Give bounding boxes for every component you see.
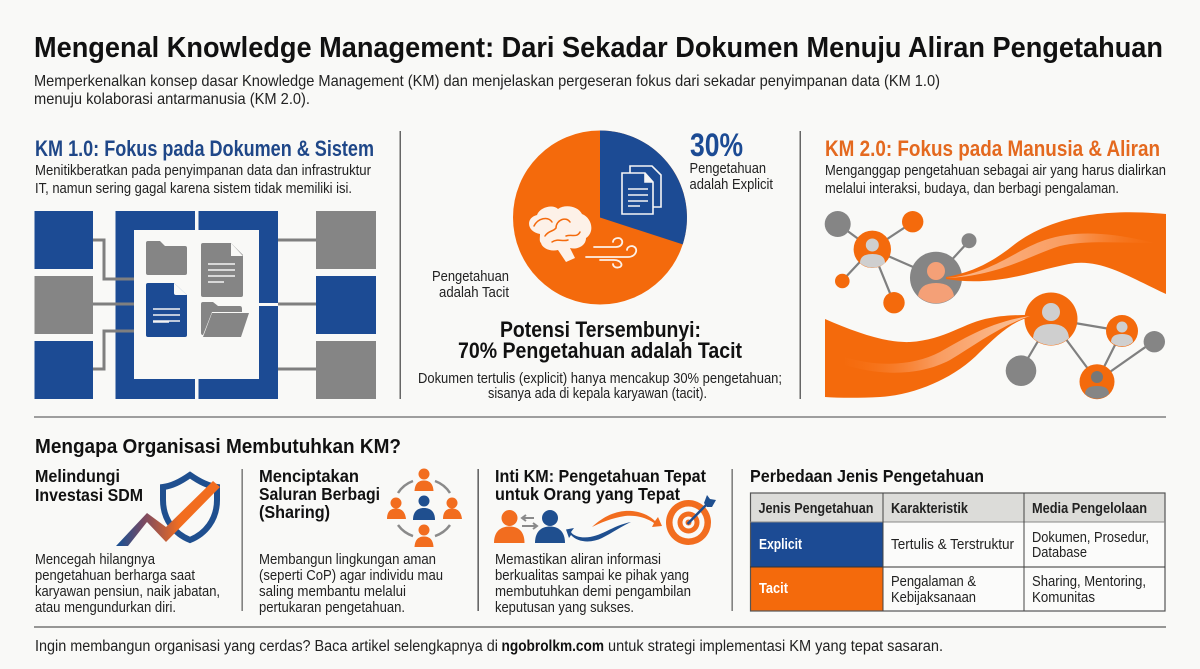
description: hidden potential: Dokumen tertulis (explicit) hanya mencakup 30% pengetahuan; <box>418 371 782 387</box>
stat: 30 percent <box>690 127 773 193</box>
heading: Inti KM: Pengetahuan Tepat <box>495 466 706 486</box>
icon: documents <box>622 166 661 214</box>
stat: 30 percent: 30% <box>690 127 743 163</box>
table row: tacit: Sharing, Mentoring, <box>1032 574 1146 590</box>
table row: tacit <box>759 574 1146 606</box>
table row: explicit <box>759 530 1149 561</box>
icon: blue document <box>146 283 187 337</box>
stat: 30 percent: Pengetahuan <box>690 161 766 177</box>
heading: hidden potential: 70% Pengetahuan adalah Tacit <box>458 338 743 363</box>
description: keputusan yang sukses. <box>495 600 634 616</box>
label: tacit: Pengetahuan <box>432 269 509 285</box>
section heading: why KM: Mengapa Organisasi Membutuhkan KM? <box>35 436 401 458</box>
description <box>495 552 691 616</box>
description: Mencegah hilangnya <box>35 552 156 568</box>
description: (seperti CoP) agar individu mau <box>259 568 443 584</box>
description: KM 1.0: IT, namun sering gagal karena sistem tidak memiliki isi. <box>35 180 352 197</box>
footer call to action <box>35 638 943 655</box>
description <box>259 552 443 616</box>
description: membutuhkan demi pengambilan <box>495 584 691 600</box>
description: berkualitas sampai ke pihak yang <box>495 568 689 584</box>
description: Membangun lingkungan aman <box>259 552 436 568</box>
illustration: top network and flow <box>825 211 1166 313</box>
description: hidden potential <box>418 371 782 402</box>
heading: Menciptakan <box>259 466 359 486</box>
description: saling membantu melalui <box>259 584 406 600</box>
description: KM 2.0 <box>825 162 1166 197</box>
description: pertukaran pengetahuan. <box>259 600 405 616</box>
heading: (Sharing) <box>259 502 330 522</box>
heading <box>495 466 706 504</box>
icon: open folder <box>201 302 249 337</box>
heading: hidden potential <box>458 317 743 363</box>
intro text: Memperkenalkan konsep dasar Knowledge Management (KM) dan menjelaskan pergeseran fokus dari sekadar penyimpanan data (KM 1.0) <box>34 73 940 90</box>
panel: pie chart center <box>418 127 782 402</box>
description: Memastikan aliran informasi <box>495 552 661 568</box>
heading: hidden potential: Potensi Tersembunyi: <box>500 317 701 342</box>
description <box>35 552 220 616</box>
icon: grey folder <box>146 241 187 275</box>
description: KM 2.0: melalui interaksi, budaya, dan berbagi pengalaman. <box>825 180 1119 197</box>
panel: KM 1.0 <box>34 136 376 399</box>
column: protect HR investment <box>35 466 220 616</box>
icon: wind <box>586 238 636 268</box>
table row: tacit: Tacit <box>759 581 788 597</box>
description: karyawan pensiun, naik jabatan, <box>35 584 220 600</box>
icon: grey document <box>201 243 243 297</box>
table heading: Perbedaan Jenis Pengetahuan <box>750 466 984 486</box>
stat: 30 percent: adalah Explicit <box>690 177 773 193</box>
heading: Melindungi <box>35 466 120 486</box>
column: core of KM <box>494 466 716 616</box>
description: atau mengundurkan diri. <box>35 600 176 616</box>
column: create sharing channels <box>259 466 462 616</box>
icon: people, flow and target <box>494 495 716 545</box>
diagram: document system <box>34 211 376 399</box>
table header row <box>758 501 1147 517</box>
pie chart <box>513 130 687 304</box>
heading: KM 1.0: KM 1.0: Fokus pada Dokumen & Sistem <box>35 136 374 161</box>
label: tacit <box>432 269 509 301</box>
illustration: bottom network and flow <box>825 292 1165 399</box>
description: KM 1.0 <box>35 162 371 197</box>
icon: brain <box>529 206 591 262</box>
icon: sharing circle <box>387 468 462 547</box>
description: KM 1.0: Menitikberatkan pada penyimpanan data dan infrastruktur <box>35 162 371 179</box>
table row: tacit: Kebijaksanaan <box>891 590 976 606</box>
heading: Investasi SDM <box>35 485 143 505</box>
intro text <box>34 73 940 108</box>
intro text: menuju kolaborasi antarmanusia (KM 2.0). <box>34 91 310 108</box>
table header row: Jenis Pengetahuan <box>758 501 874 517</box>
label: tacit: adalah Tacit <box>439 285 509 301</box>
table row: tacit: Komunitas <box>1032 590 1095 606</box>
footer call to action: ngobrolkm.com <box>502 638 604 655</box>
table row: explicit: Tertulis & Terstruktur <box>891 537 1014 553</box>
heading <box>35 466 143 505</box>
panel: knowledge types table <box>750 466 1165 611</box>
panel: KM 2.0 <box>825 136 1166 399</box>
heading <box>259 466 380 522</box>
description: hidden potential: sisanya ada di kepala karyawan (tacit). <box>488 386 707 402</box>
table <box>750 493 1165 611</box>
footer call to action: Ingin membangun organisasi yang cerdas? Baca artikel selengkapnya di <box>35 638 498 655</box>
icon: shield with rising arrow <box>116 475 220 546</box>
description: pengetahuan berharga saat <box>35 568 195 584</box>
table header row: Karakteristik <box>891 501 969 517</box>
table row: tacit: Pengalaman & <box>891 574 976 590</box>
heading: Saluran Berbagi <box>259 484 380 504</box>
table row: explicit: Dokumen, Prosedur, <box>1032 530 1149 546</box>
table row: explicit: Database <box>1032 545 1087 561</box>
heading: untuk Orang yang Tepat <box>495 484 680 504</box>
table header row: Media Pengelolaan <box>1032 501 1147 517</box>
footer call to action: untuk strategi implementasi KM yang tepat sasaran. <box>608 638 943 655</box>
table row: explicit: Explicit <box>759 537 802 553</box>
